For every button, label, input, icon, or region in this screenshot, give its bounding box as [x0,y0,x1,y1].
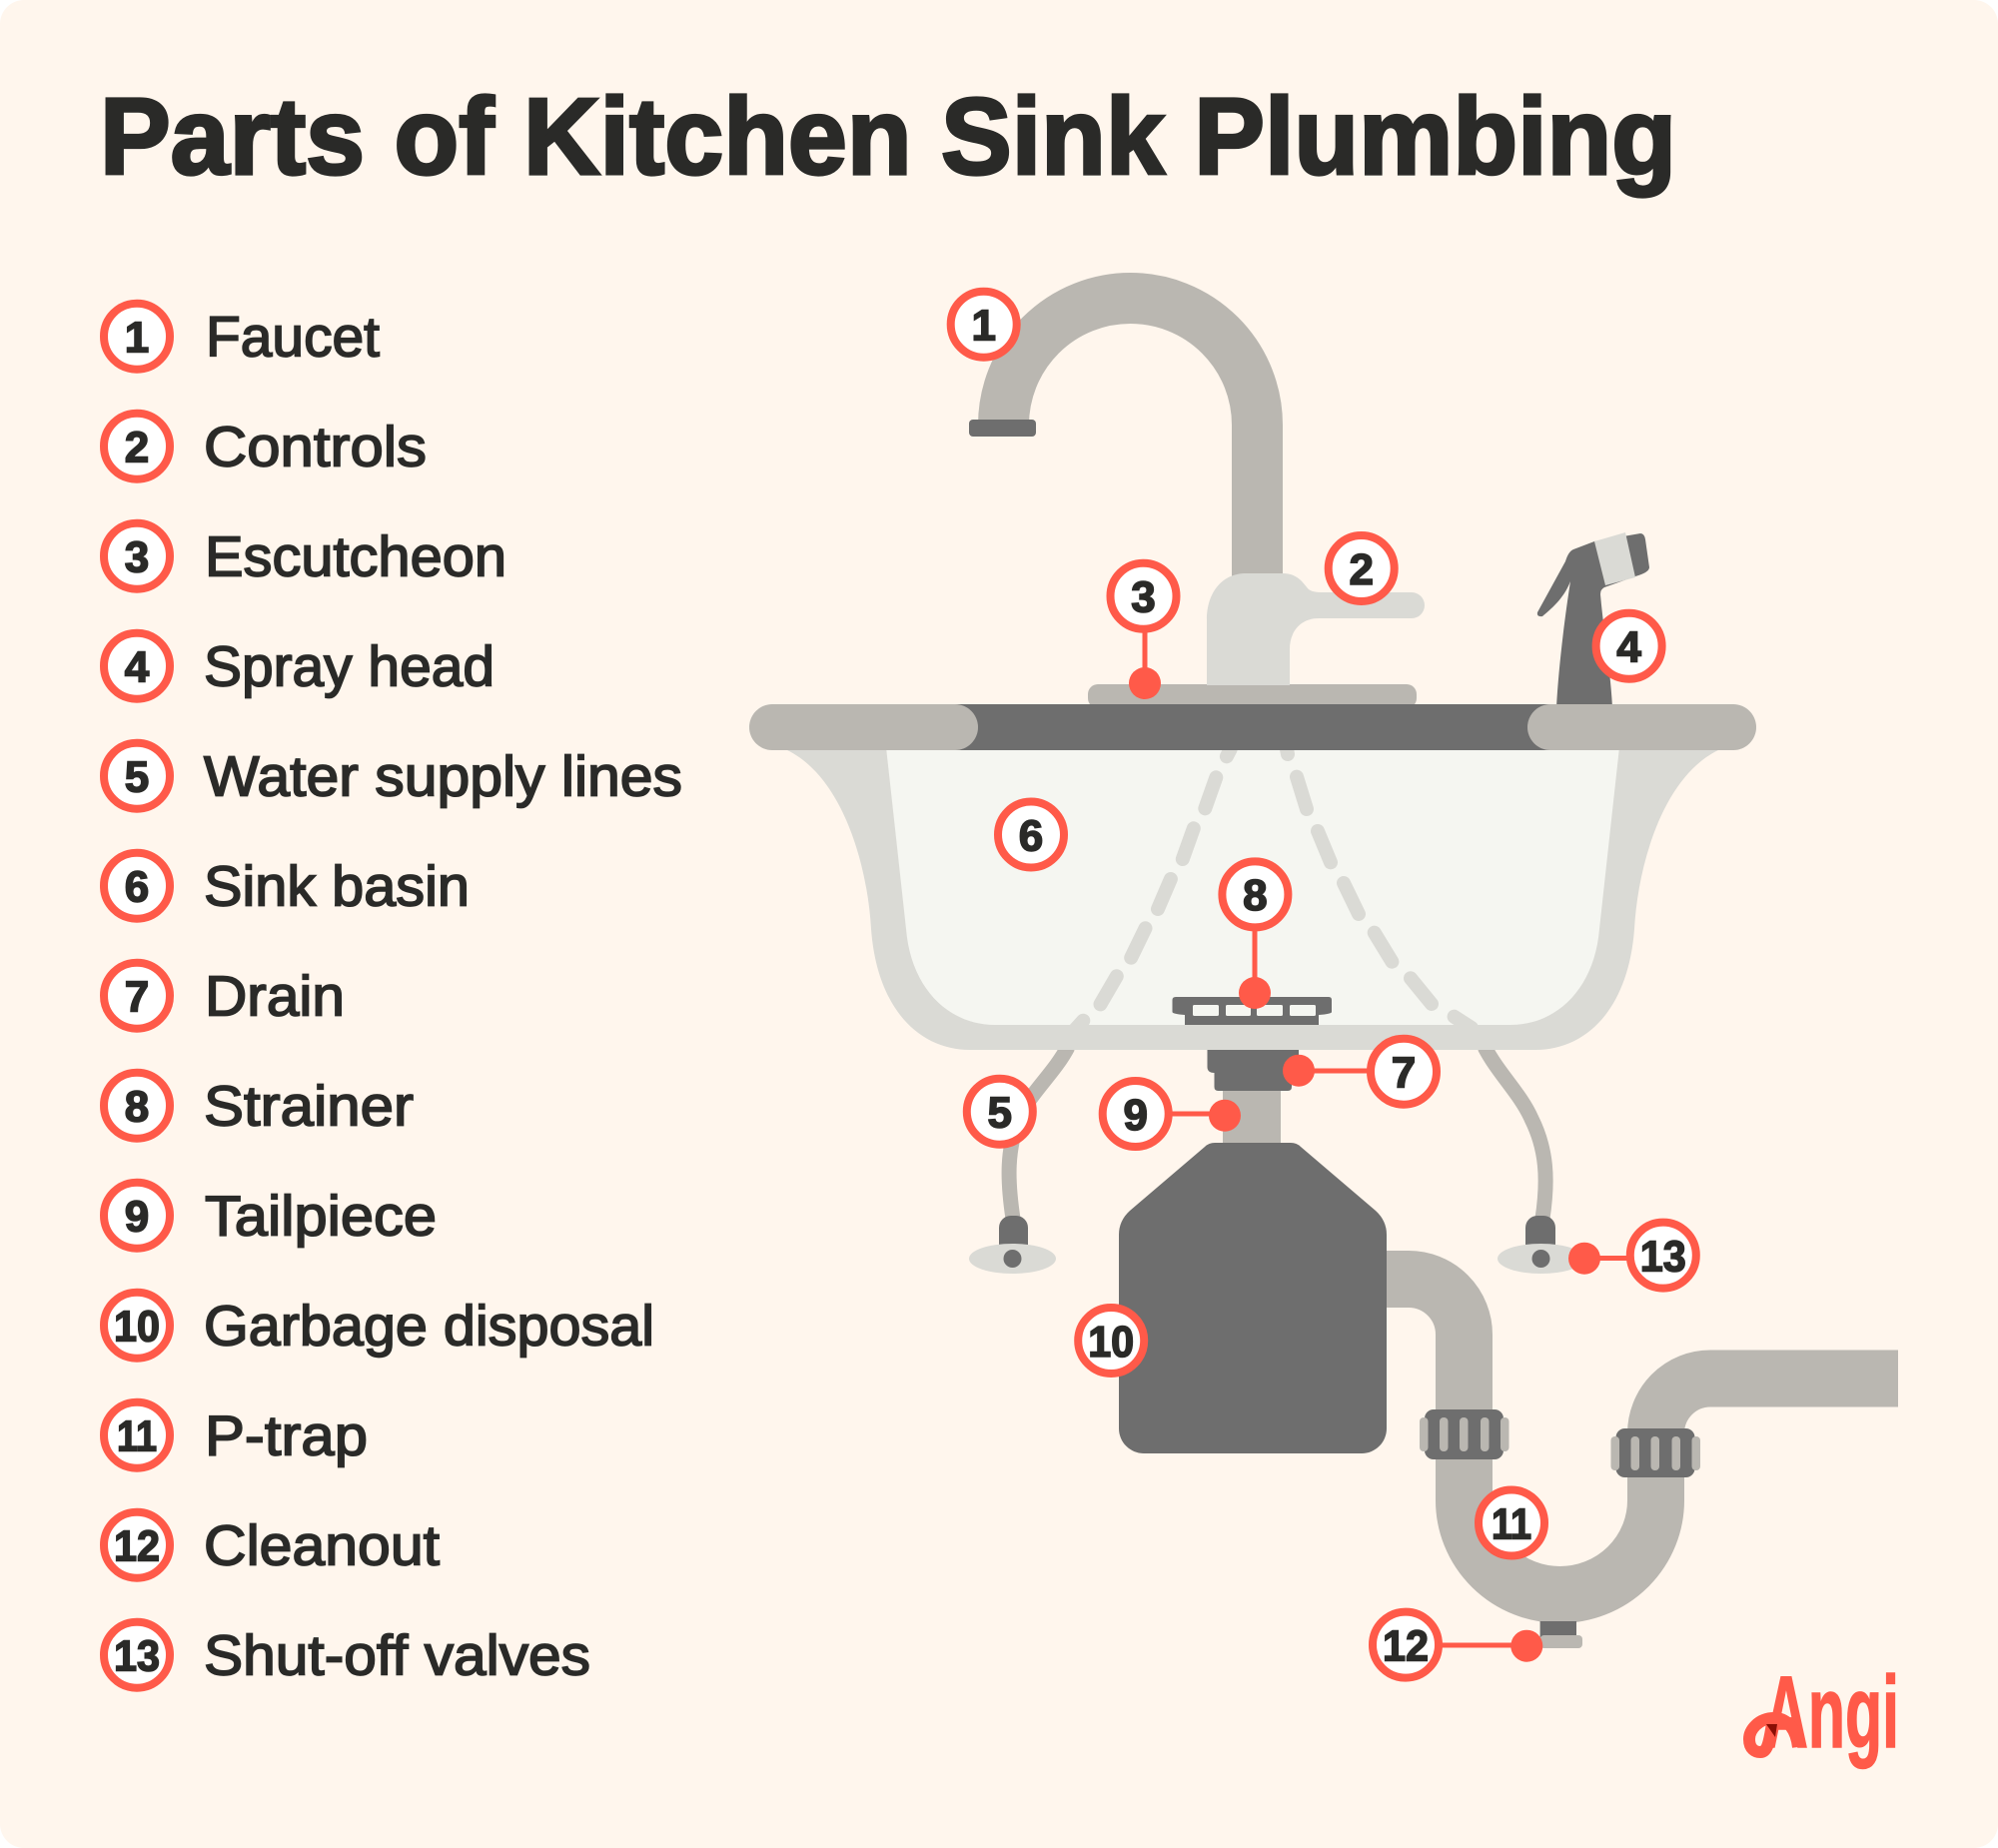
legend item 5: Water supply lines [204,745,682,809]
legend item 9 [104,1183,437,1249]
strainer [1173,997,1332,1025]
callout 6: 6 [1019,811,1043,860]
legend item 6 [104,853,470,919]
tailpiece [1223,1089,1281,1145]
cleanout [1540,1621,1582,1648]
dashed supply lines inside basin [1074,749,1472,1031]
Angi logo: Angi [1764,1655,1899,1769]
callout 3: 3 [1131,573,1156,621]
callout 13 [1568,1223,1696,1289]
legend item 4: Spray head [204,635,495,699]
legend item 9: 9 [125,1193,149,1241]
callout 9 [1103,1081,1241,1147]
callout 11: 11 [1492,1499,1531,1548]
legend item 1 [104,304,380,370]
legend item 1: Faucet [206,306,380,370]
legend item 11: P-trap [205,1404,368,1468]
legend item 2 [104,414,427,479]
legend item 3: Escutcheon [205,525,506,589]
sink basin [780,747,1725,1050]
legend item 9: Tailpiece [205,1185,437,1249]
P-trap pipe [1379,1279,1898,1594]
shut-off valve right [1498,1216,1584,1274]
legend item 5: 5 [125,753,149,801]
legend item 10: Garbage disposal [204,1295,654,1359]
legend item 3: 3 [125,533,149,581]
callout 5: 5 [988,1089,1012,1137]
countertop [749,704,1756,750]
spray head [1537,532,1649,707]
callout 2 [1329,535,1395,601]
legend item 2: 2 [125,424,149,471]
legend item 2: Controls [204,416,427,479]
legend item 8 [104,1073,414,1139]
legend item 7: Drain [205,965,345,1029]
legend item 7 [104,963,345,1029]
water supply lines under basin [1009,1047,1545,1219]
legend item 6: Sink basin [204,855,470,919]
garbage disposal [1119,1143,1387,1453]
callout 3 [1111,563,1177,699]
drain [1207,1050,1299,1091]
legend item 13: 13 [114,1632,160,1680]
callout 4: 4 [1616,623,1641,671]
faucet [969,298,1257,579]
escutcheon [1088,684,1417,708]
callout 11 [1479,1490,1544,1556]
legend item 8: 8 [125,1083,149,1131]
callout 9: 9 [1123,1091,1148,1140]
callout 12: 12 [1383,1621,1429,1670]
callout 6 [998,801,1064,867]
callout 1: 1 [971,302,996,350]
legend item 1: 1 [125,314,149,362]
legend list [104,304,682,1688]
callout 10: 10 [1088,1318,1134,1367]
legend item 11 [104,1402,368,1468]
pipe clamp left [1420,1409,1508,1459]
callout 5 [967,1079,1033,1145]
legend item 12: 12 [114,1522,160,1570]
callout 10 [1078,1308,1144,1374]
legend item 4: 4 [125,643,150,691]
legend item 10: 10 [114,1303,160,1351]
callout 12 [1373,1612,1542,1678]
callout 2: 2 [1349,545,1374,594]
callout 7 [1283,1039,1437,1105]
title: Parts of Kitchen Sink Plumbing [100,76,1676,198]
legend item 8: Strainer [204,1075,414,1139]
legend item 7: 7 [125,973,149,1021]
pipe clamp right [1610,1428,1700,1477]
Angi logo [1749,1655,1899,1769]
callout 8 [1222,861,1288,1009]
legend item 6: 6 [125,863,149,911]
callout 4 [1596,613,1662,679]
callout 8: 8 [1243,871,1268,920]
legend item 12 [104,1512,440,1578]
callout 1 [951,292,1017,358]
callout 13: 13 [1640,1232,1686,1281]
callout 7: 7 [1392,1049,1416,1097]
legend item 11: 11 [117,1412,157,1460]
controls [1207,573,1425,685]
sink illustration [749,298,1898,1648]
shut-off valve left [969,1216,1056,1274]
legend item 12: Cleanout [204,1514,440,1578]
legend item 13: Shut-off valves [204,1624,590,1688]
